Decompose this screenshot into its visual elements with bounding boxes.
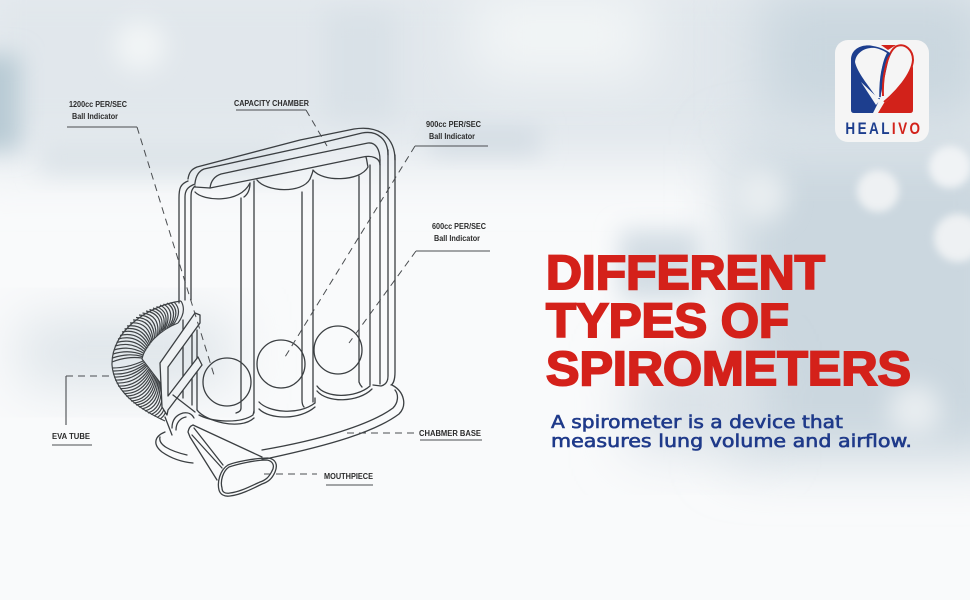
label: 600cc ball indicator: 600cc PER/SEC (432, 221, 486, 231)
corrugated EVA tube (112, 301, 183, 421)
label: 1200cc ball indicator: 1200cc PER/SEC (69, 99, 127, 109)
capacity chamber handle (188, 128, 395, 188)
chamber columns (179, 150, 395, 413)
subtitle text: A spirometer is a device that (551, 413, 843, 433)
title: DIFFERENT (546, 246, 825, 300)
label: chamber base: CHABMER BASE (419, 428, 481, 438)
label: mouthpiece: MOUTHPIECE (324, 471, 373, 481)
chamber cups (197, 386, 372, 424)
label: 600cc ball indicator (349, 221, 490, 343)
label: capacity chamber (234, 98, 327, 146)
label: 900cc ball indicator: 900cc PER/SEC (426, 119, 481, 129)
label: 1200cc ball indicator (67, 99, 214, 375)
label: EVA tube (52, 376, 113, 445)
label: EVA tube: EVA TUBE (52, 431, 90, 441)
spirometer line drawing (112, 128, 404, 496)
logo: Healivo badge (835, 40, 929, 142)
logo wordmark: HEALIVO (845, 120, 920, 138)
chamber base (156, 385, 404, 463)
label: 600cc ball indicator: Ball Indicator (434, 233, 481, 243)
label: mouthpiece (264, 471, 373, 485)
mouthpiece (165, 413, 276, 496)
subtitle text (551, 413, 912, 452)
subtitle text: measures lung volume and airflow. (551, 432, 912, 452)
label: 1200cc ball indicator: Ball Indicator (72, 111, 119, 121)
tube clip bracket (160, 313, 202, 415)
balls (203, 326, 362, 406)
label: 900cc ball indicator: Ball Indicator (429, 131, 476, 141)
title: SPIROMETERS (546, 342, 911, 396)
label: chamber base (347, 428, 482, 440)
title (546, 246, 911, 396)
label: 900cc ball indicator (285, 119, 488, 357)
logo mark: heart (851, 45, 913, 113)
title: TYPES OF (546, 294, 789, 348)
label: capacity chamber: CAPACITY CHAMBER (234, 98, 310, 108)
